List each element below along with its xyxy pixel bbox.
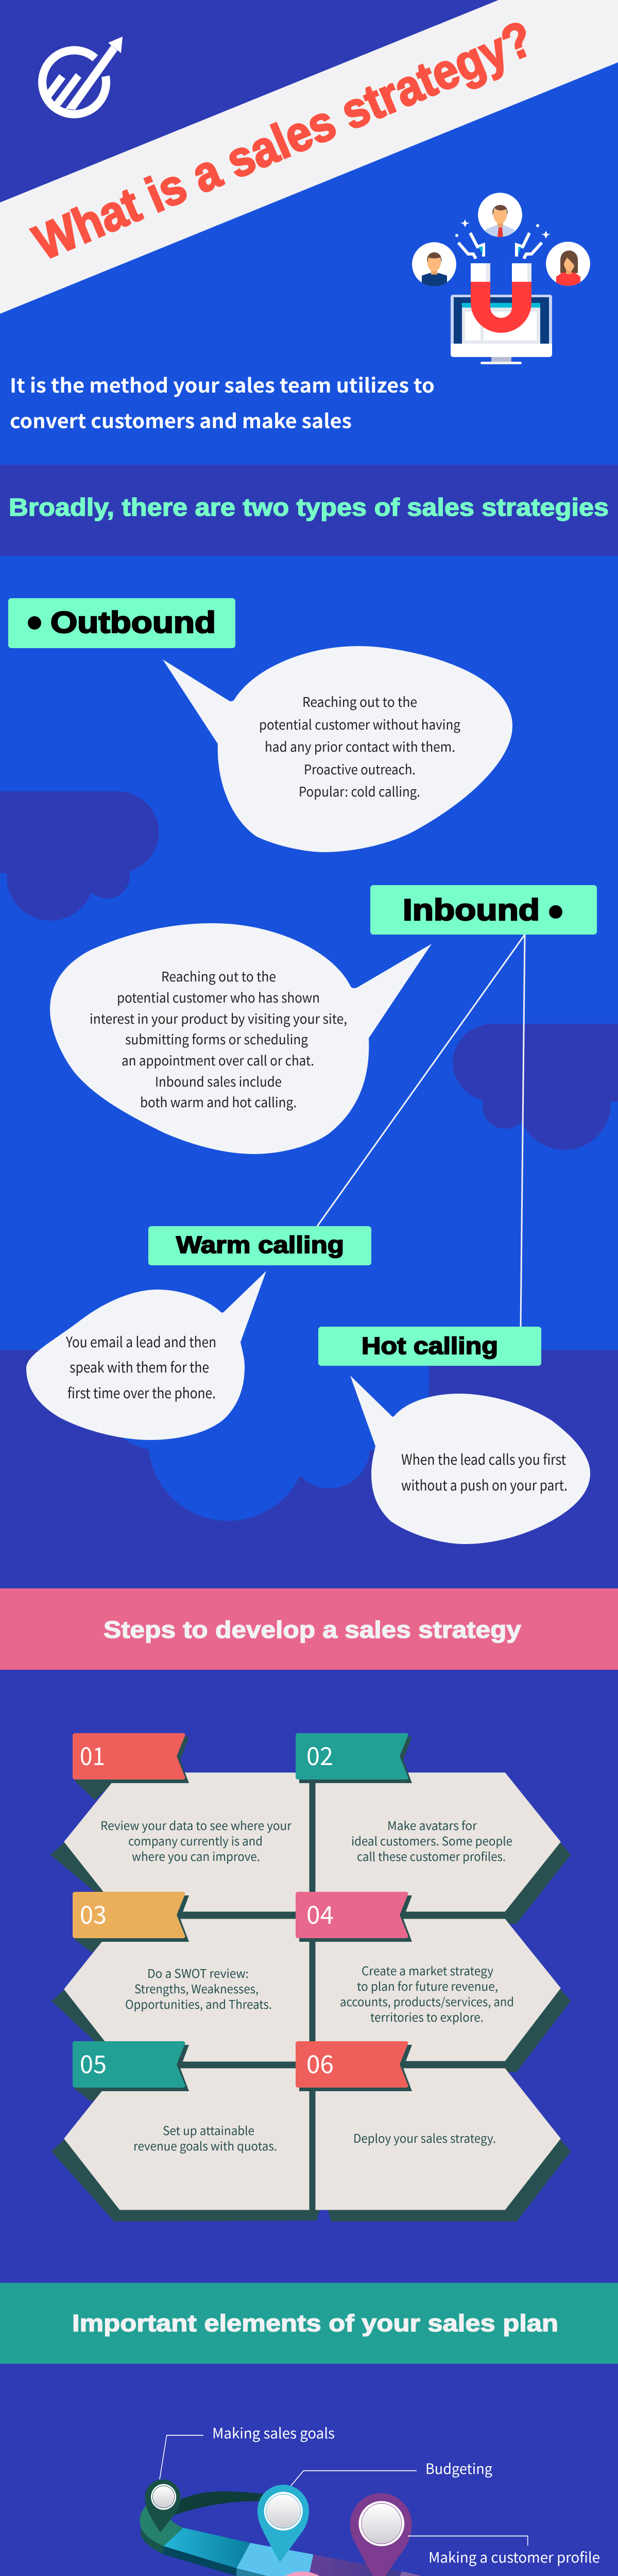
text: inbound description: both warm and hot calling. <box>140 1092 297 1111</box>
chart: winding road arrow with pins <box>23 2435 528 2576</box>
text: inbound description: interest in your product by visiting your site, <box>90 1009 347 1028</box>
flag 04: 04 <box>306 1895 334 1931</box>
speech bubble: inbound <box>50 923 432 1154</box>
text: hot calling description: When the lead calls you first <box>401 1449 566 1469</box>
illustration: magnet attracting customers <box>412 193 590 364</box>
text: hot calling description <box>401 1449 568 1495</box>
text: inbound description: potential customer who has shown <box>117 988 320 1007</box>
label: budgeting: Budgeting <box>425 2458 492 2479</box>
pin 2: cyan <box>258 2485 309 2562</box>
text block: definition: convert customers and make sales <box>10 405 352 434</box>
text: outbound description: had any prior contact with them. <box>265 737 455 756</box>
text: outbound description: Reaching out to the <box>302 692 417 711</box>
text: inbound description: Reaching out to the <box>161 967 276 986</box>
decorative cloud right <box>453 1024 618 1150</box>
speech bubble: outbound <box>163 646 512 852</box>
text: outbound description: potential customer without having <box>259 715 460 734</box>
text: outbound description: Popular: cold calling. <box>299 782 420 801</box>
text: warm calling description: speak with them for the <box>70 1357 209 1377</box>
label: customer profile: Making a customer profile <box>428 2547 600 2567</box>
icon: customer avatar man in shirt <box>478 193 522 239</box>
pin 3: purple <box>350 2493 412 2576</box>
speech bubble: warm calling <box>26 1271 266 1440</box>
step 2 panel: ideal customers. Some people <box>351 1832 512 1849</box>
label: inbound <box>370 885 597 935</box>
label: outbound: Outbound <box>50 606 216 639</box>
road: start green <box>140 2505 183 2554</box>
icon: monitor <box>451 295 552 364</box>
flag 02 <box>296 1733 412 1783</box>
text: outbound description: Proactive outreach. <box>304 759 416 778</box>
heading band: elements: Important elements of your sales plan <box>72 2310 558 2336</box>
flag 03: 03 <box>80 1895 107 1931</box>
text: warm calling description: first time over the phone. <box>67 1382 216 1403</box>
road: back arc <box>165 2492 268 2515</box>
step 4 panel <box>316 1920 560 2060</box>
text: hot calling description: without a push on your part. <box>401 1475 568 1495</box>
step 5 panel: Set up attainable <box>163 2121 254 2139</box>
step 4 panel: territories to explore. <box>370 2008 484 2025</box>
flag 06: 06 <box>306 2044 334 2080</box>
step 3 panel: Strengths, Weaknesses, <box>134 1979 259 1997</box>
step 3 panel <box>65 1920 308 2061</box>
step 3 panel: Do a SWOT review: <box>147 1964 249 1981</box>
label: warm calling: Warm calling <box>176 1231 344 1258</box>
panel: hero title band <box>0 0 618 314</box>
step 5 panel: revenue goals with quotas. <box>133 2137 277 2154</box>
text block: definition: It is the method your sales team utilizes to <box>10 370 435 398</box>
step 3 panel: Opportunities, and Threats. <box>125 1995 272 2012</box>
decorative cloud lower <box>98 1288 429 1521</box>
text: inbound description: an appointment over call or chat. <box>122 1050 314 1070</box>
step 4 panel: accounts, products/services, and <box>340 1992 514 2010</box>
step shadows and connector bars <box>50 1777 571 2222</box>
pin 4: pink <box>267 2571 338 2576</box>
step 4 panel: Create a market strategy <box>362 1961 493 1979</box>
panel: six steps diagram <box>50 1733 571 2222</box>
heading: two types of sales strategies: Broadly, there are two types of sales strategies <box>9 494 609 521</box>
pin 1: dark green <box>145 2480 181 2532</box>
speech bubble: hot calling <box>350 1376 590 1544</box>
label: hot calling: Hot calling <box>362 1332 498 1359</box>
icon: horseshoe magnet <box>471 263 531 333</box>
heading band: steps <box>0 1588 618 1670</box>
icon: customer avatar woman <box>546 242 590 289</box>
flag 01: 01 <box>80 1736 105 1772</box>
flag 05 <box>73 2041 189 2091</box>
text: inbound description: Inbound sales include <box>155 1072 282 1091</box>
leader lines <box>58 2435 528 2576</box>
flag 01 <box>73 1733 189 1783</box>
road: purple segment <box>310 2554 402 2576</box>
text block: definition <box>10 370 435 434</box>
flag 04 <box>296 1892 412 1942</box>
step 2 panel <box>316 1773 560 1911</box>
text: warm calling description: You email a lead and then <box>65 1331 216 1352</box>
flag 03 <box>73 1892 189 1942</box>
label: outbound <box>8 598 235 648</box>
label: making sales goals: Making sales goals <box>212 2422 335 2443</box>
step 6 panel <box>316 2069 560 2209</box>
label: warm calling <box>148 1226 371 1265</box>
flag 02: 02 <box>306 1736 333 1772</box>
flag 06 <box>296 2041 412 2091</box>
step 1 panel: company currently is and <box>128 1832 263 1849</box>
step 1 panel: Review your data to see where your <box>100 1816 291 1834</box>
text: warm calling description <box>65 1331 216 1403</box>
text: inbound description <box>90 967 347 1111</box>
label: hot calling <box>318 1327 541 1366</box>
text: inbound description: submitting forms or scheduling <box>125 1029 308 1048</box>
road: light blue segment <box>236 2543 313 2576</box>
road: light purple turn <box>389 2571 472 2576</box>
connector lines from inbound to calling types <box>317 935 525 1327</box>
decorative cloud left <box>0 791 159 921</box>
label: inbound: Inbound <box>403 893 540 927</box>
road: cyan segment <box>164 2528 250 2576</box>
step 1 panel: where you can improve. <box>132 1847 260 1865</box>
icon: growth chart logo <box>42 37 123 114</box>
step 1 panel <box>65 1773 308 1911</box>
icon: magnet sparks <box>455 219 551 259</box>
step 6 panel: Deploy your sales strategy. <box>353 2129 496 2146</box>
step 2 panel: Make avatars for <box>387 1816 477 1834</box>
step 4 panel: to plan for future revenue, <box>357 1977 498 1994</box>
text: outbound description <box>259 692 460 801</box>
heading band: steps: Steps to develop a sales strategy <box>104 1616 521 1643</box>
step 2 panel: call these customer profiles. <box>357 1847 506 1865</box>
heading band: elements <box>0 2283 618 2364</box>
icon: customer avatar man in navy <box>412 242 456 289</box>
flag 05: 05 <box>80 2044 107 2080</box>
step 5 panel <box>65 2069 308 2209</box>
